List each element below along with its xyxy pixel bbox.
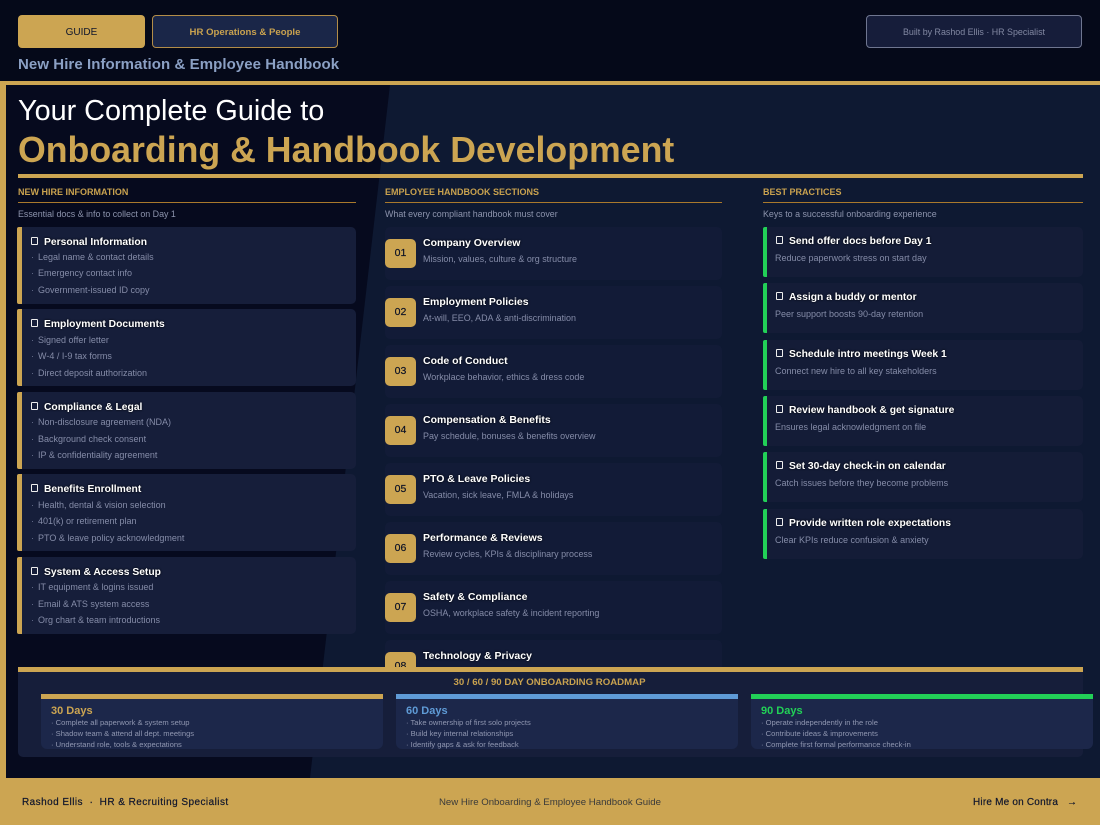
header subtitle: New Hire Information & Employee Handbook	[18, 56, 339, 73]
section 01	[385, 227, 722, 280]
title rule	[18, 174, 1083, 178]
practice 2: Assign a buddy or mentor	[789, 292, 917, 303]
practice 2: Peer support boosts 90-day retention	[775, 309, 923, 319]
card: system and access setup: Org chart & team introductions	[38, 615, 160, 625]
section 07: 07	[395, 601, 406, 613]
card: employment documents: ·	[31, 351, 34, 361]
heading: best practices: BEST PRACTICES	[763, 187, 842, 197]
section 05: Vacation, sick leave, FMLA & holidays	[423, 490, 573, 500]
section 06: Review cycles, KPIs & disciplinary process	[423, 549, 592, 559]
practice 6	[763, 509, 1083, 559]
panel: onboarding roadmap	[18, 667, 1093, 757]
left accent bar	[0, 85, 6, 778]
title block	[18, 95, 674, 170]
footer title: New Hire Onboarding & Employee Handbook Guide	[439, 797, 661, 808]
section 06: Performance & Reviews	[423, 532, 543, 544]
roadmap: 90 days: · Operate independently in the role	[761, 718, 878, 727]
card: compliance and legal: ·	[31, 417, 34, 427]
card: personal information: Government-issued ID copy	[38, 285, 150, 295]
practice 1: Send offer docs before Day 1	[789, 236, 931, 247]
card: personal information: Personal Information	[44, 237, 147, 248]
section 07	[385, 581, 722, 634]
footer band	[0, 778, 1100, 825]
card: benefits enrollment: ·	[31, 533, 34, 543]
section 02: 02	[395, 306, 406, 318]
card: compliance and legal: ·	[31, 434, 34, 444]
section 03: Workplace behavior, ethics & dress code	[423, 372, 584, 382]
subheading: What every compliant handbook must cover	[385, 209, 558, 219]
section 06	[385, 522, 722, 575]
practice 6: Provide written role expectations	[789, 518, 951, 529]
card: employment documents: Direct deposit authorization	[38, 368, 147, 378]
card: system and access setup: Email & ATS system access	[38, 599, 149, 609]
practice 4: Review handbook & get signature	[789, 405, 954, 416]
card: compliance and legal: Non-disclosure agreement (NDA)	[38, 417, 171, 427]
section 02	[385, 286, 722, 339]
roadmap: 30 days: · Understand role, tools & expectations	[51, 740, 182, 749]
roadmap: 90 days	[751, 694, 1093, 749]
card: compliance and legal: Background check consent	[38, 434, 146, 444]
footer author: Rashod Ellis · HR & Recruiting Specialist	[22, 797, 229, 808]
subheading: Keys to a successful onboarding experience	[763, 209, 937, 219]
roadmap: 60 days: · Build key internal relationships	[406, 729, 513, 738]
card: personal information: Emergency contact info	[38, 268, 132, 278]
card: employment documents: Employment Documents	[44, 319, 165, 330]
card: employment documents: ·	[31, 335, 34, 345]
card: personal information: ·	[31, 285, 34, 295]
badge: category	[152, 15, 338, 48]
badge: author: Built by Rashod Ellis · HR Specialist	[903, 27, 1045, 37]
card: system and access setup: ·	[31, 615, 34, 625]
roadmap: 60 days	[396, 694, 738, 749]
heading: handbook sections: EMPLOYEE HANDBOOK SECTIONS	[385, 187, 539, 197]
practice 3	[763, 340, 1083, 390]
column: best practices	[763, 187, 1083, 559]
heading: new hire information: NEW HIRE INFORMATION	[18, 187, 128, 197]
card: personal information: ·	[31, 252, 34, 262]
section 07: Safety & Compliance	[423, 591, 527, 603]
card: system and access setup: System & Access Setup	[44, 567, 161, 578]
section 08: Technology & Privacy	[423, 650, 532, 662]
section 04: 04	[395, 424, 406, 436]
roadmap: 90 days: 90 Days	[761, 705, 803, 717]
roadmap: 30 days: 30 Days	[51, 705, 93, 717]
column: employee handbook sections	[385, 187, 722, 667]
section 05	[385, 463, 722, 516]
practice 4: Ensures legal acknowledgment on file	[775, 422, 926, 432]
section 04: Compensation & Benefits	[423, 414, 551, 426]
section 01: Company Overview	[423, 237, 520, 249]
card: benefits enrollment: ·	[31, 516, 34, 526]
badge: author	[866, 15, 1082, 48]
section 03	[385, 345, 722, 398]
section 05: 05	[395, 483, 406, 495]
card: system and access setup: ·	[31, 582, 34, 592]
card: system and access setup: ·	[31, 599, 34, 609]
section 01: Mission, values, culture & org structure	[423, 254, 577, 264]
card: employment documents: Signed offer letter	[38, 335, 109, 345]
roadmap: 30 days: · Shadow team & attend all dept. meetings	[51, 729, 194, 738]
roadmap: 60 days: · Take ownership of first solo projects	[406, 718, 531, 727]
section 04: Pay schedule, bonuses & benefits overview	[423, 431, 595, 441]
section 08	[385, 640, 722, 693]
section 02: At-will, EEO, ADA & anti-discrimination	[423, 313, 576, 323]
card: compliance and legal: IP & confidentiality agreement	[38, 450, 157, 460]
section 07: OSHA, workplace safety & incident reporting	[423, 608, 599, 618]
roadmap heading: 30 / 60 / 90 DAY ONBOARDING ROADMAP	[453, 677, 646, 688]
card: employment documents: W-4 / I-9 tax forms	[38, 351, 112, 361]
card: system and access setup: IT equipment & logins issued	[38, 582, 153, 592]
section 04	[385, 404, 722, 457]
card: compliance and legal	[17, 392, 356, 469]
card: benefits enrollment: Benefits Enrollment	[44, 484, 141, 495]
badge: guide	[18, 15, 145, 48]
practice 3: Connect new hire to all key stakeholders	[775, 366, 937, 376]
roadmap: 90 days: · Contribute ideas & improvements	[761, 729, 878, 738]
card: compliance and legal: Compliance & Legal	[44, 402, 142, 413]
card: employment documents: ·	[31, 368, 34, 378]
badge: category: HR Operations & People	[190, 27, 300, 38]
footer call to action: Hire Me on Contra →	[973, 797, 1077, 808]
card: personal information: Legal name & contact details	[38, 252, 154, 262]
card: personal information	[17, 227, 356, 304]
column: new hire information	[17, 187, 356, 634]
card: benefits enrollment: PTO & leave policy acknowledgment	[38, 533, 184, 543]
roadmap: 90 days: · Complete first formal performance check-in	[761, 740, 911, 749]
card: compliance and legal: ·	[31, 450, 34, 460]
roadmap: 30 days: · Complete all paperwork & system setup	[51, 718, 189, 727]
subheading: Essential docs & info to collect on Day 1	[18, 209, 176, 219]
title line 1: Your Complete Guide to	[18, 95, 324, 127]
practice 1: Reduce paperwork stress on start day	[775, 253, 927, 263]
roadmap: 30 days	[41, 694, 383, 749]
header band	[0, 0, 1100, 85]
roadmap: 60 days: 60 Days	[406, 705, 448, 717]
badge: guide: GUIDE	[66, 27, 97, 38]
card: benefits enrollment: Health, dental & vision selection	[38, 500, 166, 510]
practice 5: Set 30-day check-in on calendar	[789, 461, 946, 472]
card: benefits enrollment: ·	[31, 500, 34, 510]
roadmap: 60 days: · Identify gaps & ask for feedback	[406, 740, 519, 749]
practice 5	[763, 452, 1083, 502]
section 03: Code of Conduct	[423, 355, 508, 367]
card: benefits enrollment	[17, 474, 356, 551]
section 06: 06	[395, 542, 406, 554]
practice 5: Catch issues before they become problems	[775, 478, 948, 488]
card: system and access setup	[17, 557, 356, 634]
section 03: 03	[395, 365, 406, 377]
title line 2: Onboarding & Handbook Development	[18, 130, 674, 170]
practice 1	[763, 227, 1083, 277]
section 01: 01	[395, 247, 406, 259]
practice 6: Clear KPIs reduce confusion & anxiety	[775, 535, 929, 545]
practice 2	[763, 283, 1083, 333]
section 02: Employment Policies	[423, 296, 529, 308]
card: employment documents	[17, 309, 356, 386]
practice 4	[763, 396, 1083, 446]
section 05: PTO & Leave Policies	[423, 473, 530, 485]
practice 3: Schedule intro meetings Week 1	[789, 349, 947, 360]
card: benefits enrollment: 401(k) or retirement plan	[38, 516, 137, 526]
card: personal information: ·	[31, 268, 34, 278]
